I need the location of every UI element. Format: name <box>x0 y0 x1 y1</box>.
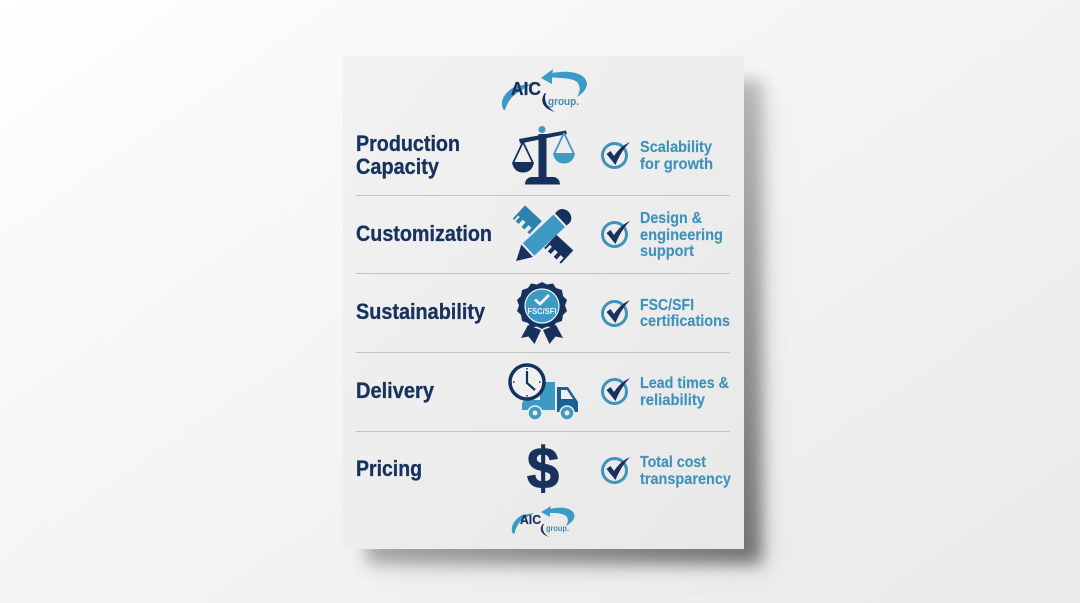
text: Total cost transparency: transparency <box>640 471 731 488</box>
text: FSC/SFI certifications <box>640 297 730 330</box>
text: Total cost transparency <box>640 454 731 488</box>
logo: top AIC group: AIC <box>511 79 541 99</box>
row: Production Capacity <box>356 126 713 184</box>
icon: balance scale <box>512 126 575 184</box>
check icon <box>602 221 630 246</box>
heading: Delivery: Delivery <box>356 378 435 403</box>
check icon <box>602 378 630 404</box>
logo: top AIC group <box>502 69 587 112</box>
icon: FSC/SFI badge: FSC/SFI <box>528 307 556 316</box>
icon: FSC/SFI badge <box>517 282 567 344</box>
text: Design & engineering support: engineering <box>640 227 723 244</box>
heading: Sustainability: Sustainability <box>356 299 486 324</box>
text: Design & engineering support <box>640 210 723 260</box>
row: Delivery <box>356 365 729 420</box>
text: Scalability for growth <box>640 139 713 173</box>
text: Scalability for growth: for growth <box>640 156 713 173</box>
row: Sustainability <box>356 282 730 344</box>
text: Lead times & reliability: reliability <box>640 392 705 409</box>
text: Lead times & reliability <box>640 375 729 409</box>
row: Pricing <box>356 436 731 501</box>
text: Total cost transparency: Total cost <box>640 454 707 471</box>
icon: clock and truck <box>510 365 578 420</box>
heading: Pricing: Pricing <box>356 456 422 481</box>
check icon <box>602 142 630 168</box>
heading: Production Capacity: Capacity <box>356 154 440 179</box>
check icon <box>602 300 630 326</box>
logo: top AIC group: group. <box>548 96 579 108</box>
text: Design & engineering support: support <box>640 243 695 260</box>
panel: card <box>343 56 744 549</box>
row dividers <box>356 196 730 432</box>
row: Customization <box>356 205 723 267</box>
logo: bottom AIC group: AIC <box>520 512 542 527</box>
text: Design & engineering support: Design & <box>640 210 702 227</box>
logo: bottom AIC group: group. <box>546 524 569 533</box>
heading: Production Capacity: Production <box>356 131 460 156</box>
text: FSC/SFI certifications: FSC/SFI <box>640 297 694 314</box>
text: Lead times & reliability: Lead times & <box>640 375 729 392</box>
text: Scalability for growth: Scalability <box>640 139 712 156</box>
heading: Customization: Customization <box>356 221 492 246</box>
card shadow <box>366 80 772 573</box>
check icon <box>602 457 630 482</box>
text: FSC/SFI certifications: certifications <box>640 313 730 330</box>
logo: bottom AIC group <box>512 506 574 537</box>
icon: dollar sign: $ <box>527 436 559 501</box>
heading: Production Capacity <box>356 131 460 179</box>
icon: ruler and pencil <box>510 205 575 267</box>
